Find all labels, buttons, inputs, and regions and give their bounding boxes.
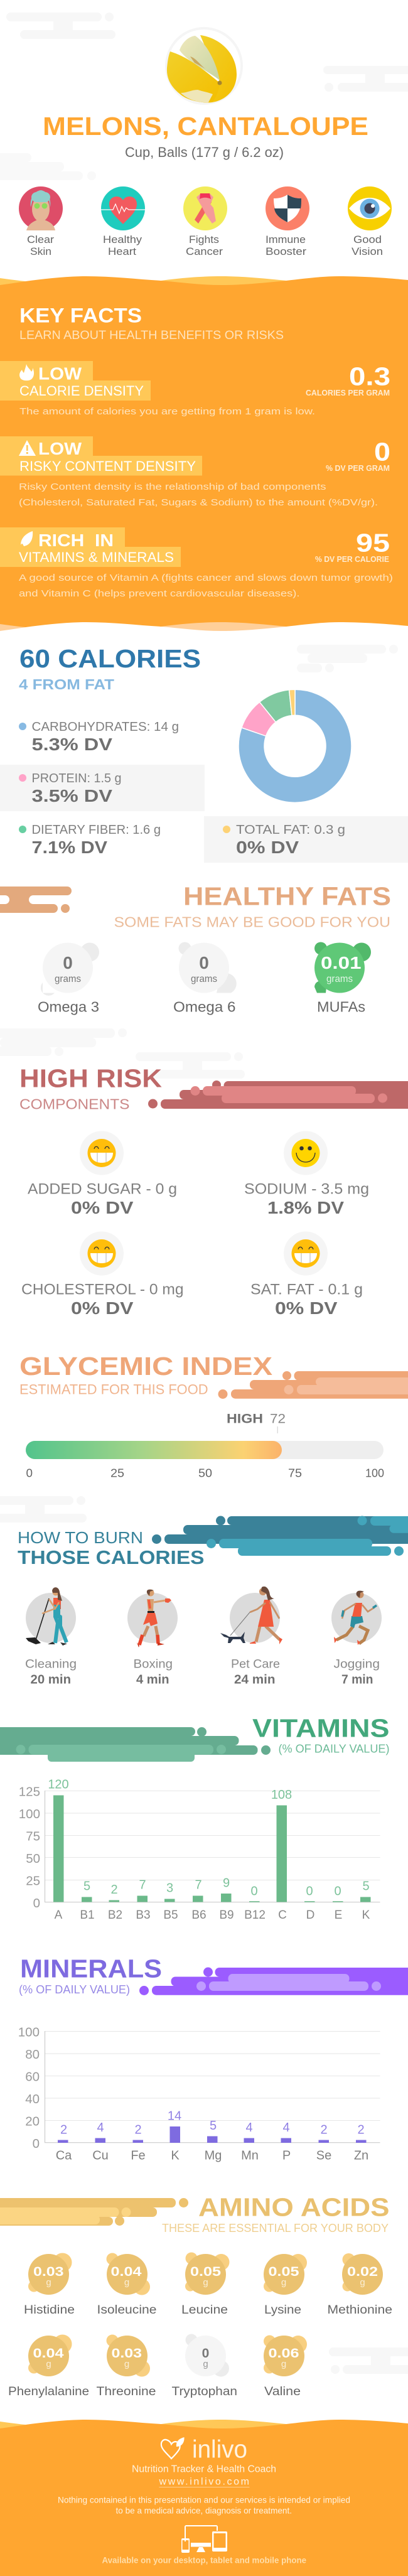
amino: phenylalanine	[8, 2334, 89, 2398]
icon: fights cancer	[183, 186, 227, 230]
decorative cloud top right	[323, 66, 408, 92]
risky content description: Risky Content density is the relationship of bad components	[19, 482, 326, 492]
amino: isoleucine	[97, 2253, 157, 2317]
subheading: components: COMPONENTS	[19, 1096, 129, 1113]
logo: inlivo heart	[161, 2437, 185, 2459]
heading: high risk: HIGH RISK	[19, 1064, 162, 1092]
label: immune booster	[266, 234, 306, 257]
calorie density value	[306, 362, 390, 397]
label: good vision	[352, 234, 383, 257]
activity: jogging: Jogging	[334, 1657, 380, 1671]
icon: good vision	[348, 186, 392, 230]
activity: cleaning	[25, 1587, 77, 1686]
fact: rich in vitamins and minerals	[0, 527, 393, 599]
amino: valine	[264, 2336, 307, 2398]
website link: www.inlivo.com	[158, 2476, 249, 2487]
bar chart: minerals: Ca	[56, 2148, 72, 2162]
rich in description: A good source of Vitamin A (fights cancer and slows down tumor growth)	[19, 573, 393, 583]
panel: amino acids	[0, 2192, 408, 2398]
bar chart: minerals: 5	[210, 2119, 217, 2133]
heading: how to burn: THOSE CALORIES	[18, 1546, 205, 1568]
component: saturated fat: SAT. FAT - 0.1 g	[250, 1281, 363, 1298]
glycemic scale	[26, 1467, 384, 1479]
subheading: glycemic: ESTIMATED FOR THIS FOOD	[19, 1381, 208, 1398]
glycemic value label	[227, 1411, 286, 1433]
bar chart: minerals: P	[282, 2148, 291, 2162]
glycemic scale: 0	[26, 1467, 33, 1479]
bar chart: vitamins: B1	[80, 1909, 95, 1922]
component: cholesterol: CHOLESTEROL - 0 mg	[21, 1281, 183, 1298]
amino: threonine: Threonine	[97, 2385, 156, 2398]
glycemic value label: 72	[270, 1411, 286, 1426]
amino: threonine	[97, 2334, 156, 2398]
calorie density value: CALORIES PER GRAM	[306, 388, 390, 397]
activity: boxing: 4 min	[136, 1673, 169, 1686]
amino: threonine: g	[124, 2359, 129, 2369]
label: fights cancer: Fights	[189, 234, 219, 245]
glycemic scale: 75	[288, 1467, 302, 1479]
component: saturated fat	[250, 1232, 363, 1318]
label: immune booster: Immune	[266, 234, 306, 245]
risky content labels: LOW	[38, 439, 82, 458]
tagline: Nutrition Tracker & Health Coach	[132, 2464, 276, 2475]
amino: leucine: Leucine	[181, 2304, 228, 2317]
logo wordmark: inlivo	[192, 2436, 247, 2464]
bar chart: vitamins: 0	[334, 1885, 341, 1899]
disclaimer: to be a medical advice, diagnosis or treatment.	[115, 2505, 292, 2515]
amino: lysine: Lysine	[264, 2304, 301, 2317]
label: clear skin: Skin	[30, 245, 51, 257]
amino: tryptophan: Tryptophan	[172, 2385, 237, 2398]
amino: lysine	[264, 2254, 307, 2317]
bar chart: minerals: Mg	[205, 2148, 222, 2162]
bar chart: minerals: 4	[97, 2121, 104, 2135]
amino: histidine: g	[46, 2277, 51, 2288]
decorative cloud above burn	[0, 1496, 87, 1522]
bar chart: vitamins: B6	[191, 1909, 207, 1922]
glycemic scale: 100	[365, 1467, 384, 1479]
bar chart: minerals: 20	[25, 2115, 40, 2128]
subheading: from fat: 4 FROM FAT	[19, 676, 114, 693]
bar chart: minerals: Se	[316, 2148, 331, 2162]
bar chart: vitamins: 108	[271, 1788, 292, 1802]
amino: methionine: g	[360, 2277, 365, 2288]
glycemic scale: 50	[198, 1467, 212, 1479]
bar chart: vitamins: B2	[108, 1909, 122, 1922]
fact: low risky content density	[0, 436, 390, 508]
amino: isoleucine: g	[124, 2277, 129, 2288]
decorative cloud glycemic	[218, 1371, 408, 1399]
component: cholesterol: 0% DV	[71, 1298, 134, 1318]
panel: calories	[0, 644, 408, 863]
bar chart: minerals: Fe	[131, 2148, 146, 2162]
heading: healthy fats: HEALTHY FATS	[183, 881, 391, 910]
risky content labels	[19, 439, 196, 474]
bar chart: minerals: K	[171, 2148, 180, 2162]
fat: mufas	[314, 942, 371, 1015]
bar chart: vitamins: 5	[83, 1880, 90, 1894]
panel: footer	[0, 2420, 408, 2576]
bar chart: minerals: 14	[168, 2110, 181, 2123]
bar chart: vitamins: B3	[136, 1909, 151, 1922]
activity: jogging	[331, 1591, 382, 1686]
label: healthy heart: Heart	[108, 245, 136, 257]
label: clear skin	[27, 234, 54, 257]
bar chart: minerals: Mn	[241, 2148, 259, 2162]
label: good vision: Good	[353, 234, 382, 245]
fat: omega 3: Omega 3	[38, 998, 99, 1015]
bar chart: vitamins: K	[362, 1909, 370, 1922]
icon: flame	[19, 364, 34, 380]
bar chart: vitamins: 2	[110, 1883, 118, 1897]
fat: mufas: grams	[326, 974, 353, 984]
bar chart: vitamins: D	[306, 1909, 314, 1922]
subheading: minerals: (% OF DAILY VALUE)	[19, 1983, 130, 1996]
subheading: healthy fats: SOME FATS MAY BE GOOD FOR YOU	[114, 914, 390, 930]
activity: jogging: 7 min	[341, 1673, 373, 1686]
component: added sugar: ADDED SUGAR - 0 g	[28, 1180, 177, 1198]
activity: cleaning: 20 min	[30, 1673, 71, 1686]
amino: leucine: 0.05	[190, 2265, 221, 2279]
activity: boxing	[127, 1590, 178, 1686]
decorative cloud top left	[6, 13, 115, 39]
bar chart: minerals: 2	[320, 2123, 328, 2137]
stat: carbohydrates: CARBOHYDRATES: 14 g	[31, 720, 179, 734]
activity: pet care: Pet Care	[231, 1657, 280, 1671]
availability note: Available on your desktop, tablet and mobile phone	[102, 2555, 306, 2565]
risky content labels: RISKY CONTENT DENSITY	[19, 458, 196, 474]
bar chart: vitamins: 120	[48, 1778, 69, 1792]
stat: total fat: 0% DV	[236, 838, 299, 857]
bar chart: minerals: 2	[357, 2123, 365, 2137]
amino: tryptophan: 0	[202, 2346, 209, 2361]
rich in labels: RICH IN	[38, 531, 114, 550]
icon: warning triangle	[19, 440, 36, 456]
risky content description	[19, 482, 378, 508]
component: saturated fat: 0% DV	[275, 1298, 338, 1318]
bar chart: minerals: 2	[60, 2123, 67, 2137]
icon: clear skin	[19, 186, 63, 230]
stat: dietary fiber	[19, 823, 161, 857]
label: fights cancer: Cancer	[186, 245, 223, 257]
decorative cloud left	[0, 153, 96, 180]
amino: isoleucine: Isoleucine	[97, 2304, 157, 2317]
panel: glycemic index	[19, 1352, 408, 1479]
bar chart: vitamins: 7	[195, 1878, 202, 1892]
component: added sugar	[28, 1131, 177, 1217]
amino: valine: g	[281, 2359, 286, 2369]
rich in value: 95	[356, 529, 390, 558]
stat: dietary fiber: 7.1% DV	[31, 838, 108, 857]
stat: dietary fiber: DIETARY FIBER: 1.6 g	[31, 823, 161, 837]
component: cholesterol	[21, 1232, 183, 1318]
rich in description	[19, 573, 393, 599]
calorie density labels: CALORIE DENSITY	[19, 383, 144, 399]
activity: pet care	[220, 1587, 282, 1686]
amino: tryptophan	[172, 2334, 237, 2398]
bar chart: vitamins: 7	[139, 1878, 146, 1892]
heading: amino acids: AMINO ACIDS	[198, 2192, 389, 2221]
rich in labels	[19, 531, 174, 565]
icon: leaf	[21, 531, 33, 546]
fat: omega 3	[38, 943, 99, 1015]
bar chart: vitamins: 0	[250, 1885, 258, 1899]
glycemic value label: HIGH	[227, 1411, 263, 1426]
heading: calories: 60 CALORIES	[19, 644, 201, 673]
key facts subheading: LEARN ABOUT HEALTH BENEFITS OR RISKS	[19, 328, 284, 342]
decorative cloud high risk	[148, 1081, 408, 1109]
serving size subtitle: Cup, Balls (177 g / 6.2 oz)	[125, 144, 284, 160]
bar chart: vitamins	[19, 1778, 380, 1922]
component: sodium	[244, 1131, 369, 1217]
stat: protein: PROTEIN: 1.5 g	[31, 772, 122, 785]
decorative cloud calories	[297, 645, 398, 672]
bar chart: minerals: 80	[25, 2047, 40, 2062]
amino: leucine: g	[203, 2277, 208, 2288]
amino: valine: 0.06	[269, 2346, 299, 2361]
panel: healthy fats	[0, 881, 391, 1015]
bar chart: vitamins: 0	[306, 1885, 313, 1899]
heading: minerals: MINERALS	[20, 1954, 162, 1983]
risky content value: % DV PER GRAM	[326, 463, 390, 473]
panel: key facts	[0, 276, 408, 641]
heading: how to burn	[18, 1528, 205, 1568]
bar chart: vitamins: 100	[19, 1807, 40, 1821]
fat: omega 6: grams	[191, 974, 217, 984]
decorative cloud healthy fats	[0, 887, 72, 913]
amino: phenylalanine: g	[46, 2359, 51, 2369]
risky content description: (Cholesterol, Saturated Fat, Sugars & Sodium) to the amount (%DV/gr).	[19, 497, 378, 508]
label: healthy heart: Healthy	[103, 234, 142, 245]
stat: total fat: TOTAL FAT: 0.3 g	[236, 823, 345, 837]
calorie density description: The amount of calories you are getting from 1 gram is low.	[19, 406, 315, 417]
amino: lysine: g	[281, 2277, 286, 2288]
bar chart: minerals: 4	[245, 2121, 253, 2135]
subheading: amino acids: THESE ARE ESSENTIAL FOR YOUR BODY	[162, 2222, 389, 2234]
icon: healthy heart	[101, 186, 145, 230]
glycemic gradient bar	[26, 1441, 384, 1459]
donut chart	[239, 689, 352, 802]
bar chart: minerals: 0	[33, 2137, 40, 2151]
calorie density labels: LOW	[38, 364, 82, 383]
bar chart: minerals	[18, 2025, 380, 2162]
stat: protein	[19, 772, 122, 806]
activity: boxing: Boxing	[133, 1657, 173, 1671]
bar chart: minerals: 60	[25, 2069, 40, 2084]
decorative cloud minerals	[139, 1968, 408, 1995]
bar chart: vitamins: C	[278, 1909, 287, 1922]
risky content value	[326, 437, 390, 473]
panel: minerals	[18, 1954, 408, 2162]
risky content value: 0	[374, 437, 390, 466]
bar chart: vitamins: 9	[223, 1876, 230, 1890]
decorative cloud amino acids	[0, 2198, 188, 2226]
bar chart: vitamins: B9	[219, 1909, 234, 1922]
label: fights cancer	[186, 234, 223, 257]
label: good vision: Vision	[352, 245, 383, 257]
fat: omega 3: 0	[63, 953, 73, 973]
decorative clouds above high risk	[0, 1028, 245, 1079]
rich in labels: VITAMINS & MINERALS	[19, 549, 174, 565]
bar chart: minerals: 100	[18, 2025, 40, 2039]
rich in value: % DV PER CALORIE	[315, 554, 389, 564]
heading: vitamins: VITAMINS	[252, 1714, 389, 1743]
amino: methionine	[328, 2253, 392, 2317]
panel: how to burn	[18, 1516, 408, 1686]
rich in value	[315, 529, 390, 564]
bar chart: minerals: Zn	[354, 2148, 368, 2162]
bar chart: vitamins: 25	[26, 1873, 40, 1889]
activity: cleaning: Cleaning	[25, 1657, 77, 1671]
amino: leucine	[181, 2253, 230, 2317]
decorative cloud amino lower right	[329, 2347, 408, 2374]
icon: devices	[181, 2525, 227, 2553]
component: sodium: SODIUM - 3.5 mg	[244, 1180, 369, 1198]
heading: glycemic index: GLYCEMIC INDEX	[19, 1352, 272, 1381]
bar chart: vitamins: 50	[26, 1851, 40, 1866]
disclaimer	[58, 2495, 350, 2515]
amino: tryptophan: g	[203, 2359, 208, 2369]
amino: lysine: 0.05	[269, 2265, 299, 2279]
bar chart: vitamins: B12	[244, 1909, 266, 1922]
fat: omega 6	[173, 942, 237, 1015]
disclaimer: Nothing contained in this presentation and our services is intended or implied	[58, 2495, 350, 2505]
fact: low calorie density	[0, 361, 390, 417]
glycemic scale: 25	[110, 1467, 124, 1479]
bar chart: minerals: 40	[25, 2092, 40, 2106]
activity: pet care: 24 min	[234, 1673, 275, 1686]
calorie density value: 0.3	[349, 362, 390, 391]
calorie density labels	[19, 364, 144, 399]
label: clear skin: Clear	[27, 234, 54, 245]
amino: histidine	[24, 2253, 75, 2317]
bar chart: minerals: 2	[134, 2123, 142, 2137]
amino: isoleucine: 0.04	[110, 2265, 142, 2279]
panel: high risk	[19, 1064, 408, 1318]
fat: mufas: MUFAs	[317, 998, 365, 1015]
bar chart: vitamins: B5	[163, 1909, 178, 1922]
fat: mufas: 0.01	[321, 953, 362, 973]
fat: omega 3: grams	[55, 974, 81, 984]
fat: omega 6: 0	[199, 953, 209, 973]
icon: immune booster	[266, 186, 309, 230]
decorative cloud burn	[152, 1516, 408, 1544]
bar chart: vitamins: 75	[26, 1830, 40, 1843]
heading: key facts: KEY FACTS	[19, 304, 142, 326]
rich in description: and Vitamin C (helps prevent cardiovascular diseases).	[19, 588, 300, 599]
bar chart: vitamins: 0	[33, 1896, 40, 1910]
stat: carbohydrates	[19, 720, 179, 754]
component: sodium: 1.8% DV	[267, 1198, 345, 1217]
amino: methionine: Methionine	[328, 2304, 392, 2317]
panel: vitamins	[0, 1714, 389, 1922]
decorative cloud vitamins	[0, 1727, 271, 1755]
stat: protein: 3.5% DV	[31, 786, 113, 806]
bar chart: minerals: 4	[282, 2121, 290, 2135]
bar chart: vitamins: 3	[166, 1881, 173, 1895]
bar chart: minerals: Cu	[92, 2148, 109, 2162]
amino: phenylalanine: 0.04	[33, 2346, 64, 2361]
amino: valine: Valine	[264, 2385, 301, 2398]
amino: threonine: 0.03	[112, 2346, 142, 2361]
amino: histidine: Histidine	[24, 2304, 75, 2317]
subheading: vitamins: (% OF DAILY VALUE)	[279, 1743, 389, 1755]
stat: total fat	[223, 823, 345, 857]
label: healthy heart	[103, 234, 142, 257]
component: added sugar: 0% DV	[71, 1198, 134, 1217]
fat: omega 6: Omega 6	[173, 998, 236, 1015]
label: immune booster: Booster	[266, 245, 306, 257]
heading: how to burn: HOW TO BURN	[18, 1528, 143, 1547]
bar chart: vitamins: 5	[362, 1880, 370, 1894]
title: MELONS, CANTALOUPE	[43, 112, 368, 141]
benefits row	[19, 186, 392, 257]
stat: carbohydrates: 5.3% DV	[31, 735, 113, 754]
amino: phenylalanine: Phenylalanine	[8, 2385, 89, 2398]
bar chart: vitamins: A	[55, 1909, 63, 1922]
bar chart: vitamins: E	[335, 1909, 342, 1922]
amino: histidine: 0.03	[33, 2265, 64, 2279]
amino: methionine: 0.02	[347, 2265, 378, 2279]
bar chart: vitamins: 125	[19, 1784, 40, 1799]
food photo: cantaloupe melon	[165, 27, 243, 105]
